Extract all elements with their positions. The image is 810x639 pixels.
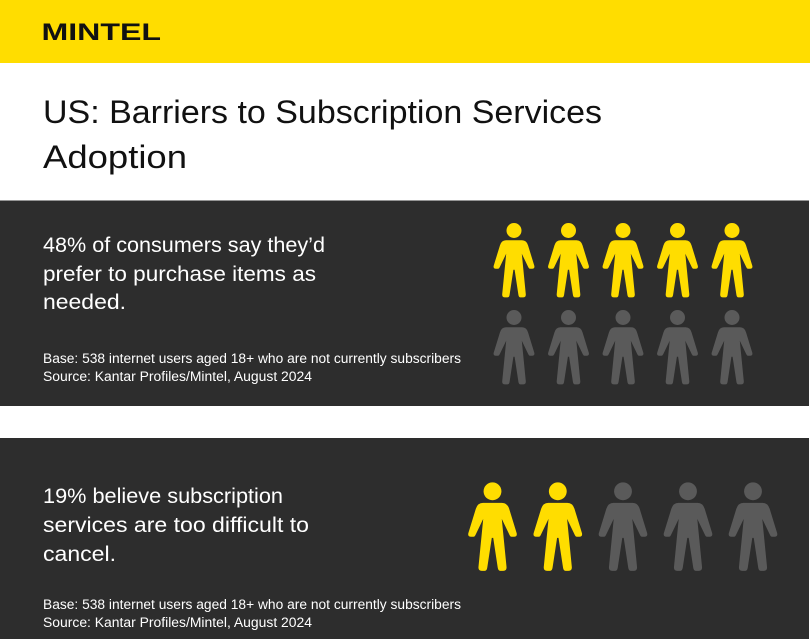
title xyxy=(43,94,602,175)
panel 2 base and source: Base: 538 internet users aged 18+ who are not currently subscribers xyxy=(43,597,461,612)
panel 2 statement: cancel. xyxy=(43,543,116,566)
panel 1 statement: prefer to purchase items as xyxy=(43,263,316,286)
panel 2 base and source: Source: Kantar Profiles/Mintel, August 2024 xyxy=(43,615,312,630)
panel 1 base and source: Base: 538 internet users aged 18+ who are not currently subscribers xyxy=(43,351,461,366)
panel 1 base and source: Source: Kantar Profiles/Mintel, August 2024 xyxy=(43,369,312,384)
panel 1 base and source xyxy=(43,351,461,384)
panel 1 background xyxy=(0,200,809,406)
header band xyxy=(0,0,810,63)
title: Adoption xyxy=(43,139,187,175)
logo: MINTEL: MINTEL xyxy=(42,19,161,46)
panel: 48% prefer to purchase as needed xyxy=(0,200,809,406)
panel 2 base and source xyxy=(43,597,461,630)
panel 2 statement: 19% believe subscription xyxy=(43,485,283,508)
panel 1 statement: needed. xyxy=(43,291,126,314)
title: US: Barriers to Subscription Services xyxy=(43,94,602,130)
panel 1 statement xyxy=(43,234,325,314)
panel 1 statement: 48% of consumers say they’d xyxy=(43,234,325,257)
panel: 19% too difficult to cancel xyxy=(0,438,809,639)
panel 2 statement: services are too difficult to xyxy=(43,514,309,537)
pictogram: 5 of 10 people highlighted xyxy=(494,223,752,384)
panel 2 background xyxy=(0,438,809,639)
pictogram: 2 of 5 people highlighted xyxy=(468,482,777,571)
panel 2 statement xyxy=(43,485,309,566)
